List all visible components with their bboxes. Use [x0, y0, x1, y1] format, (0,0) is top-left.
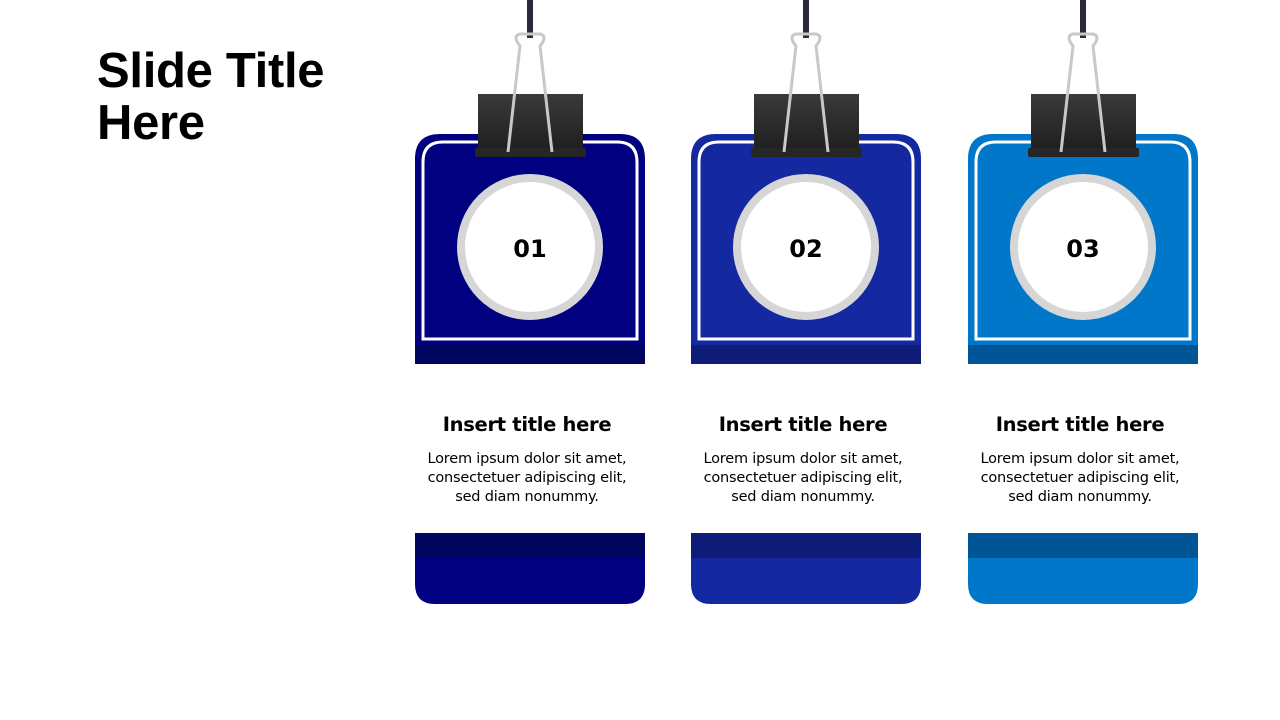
card 1: 01	[513, 235, 547, 263]
title: Here	[97, 96, 205, 150]
text block 1: Insert title here	[443, 413, 611, 436]
text block 3: consectetuer adipiscing elit,	[981, 470, 1179, 486]
text block 3: sed diam nonummy.	[1008, 489, 1152, 505]
text block 1: consectetuer adipiscing elit,	[428, 470, 626, 486]
text block 1: sed diam nonummy.	[455, 489, 599, 505]
card 3	[968, 0, 1198, 604]
text block 2: Lorem ipsum dolor sit amet,	[704, 451, 902, 467]
text block 2	[704, 413, 902, 505]
title	[97, 44, 324, 150]
text block 1: Lorem ipsum dolor sit amet,	[428, 451, 626, 467]
text block 1	[428, 413, 626, 505]
card 3: 03	[1066, 235, 1100, 263]
title: Slide Title	[97, 44, 324, 98]
card 2	[691, 0, 921, 604]
text block 3	[981, 413, 1179, 505]
card 2: 02	[789, 235, 823, 263]
text block 2: Insert title here	[719, 413, 887, 436]
text block 3: Lorem ipsum dolor sit amet,	[981, 451, 1179, 467]
card 1	[415, 0, 645, 604]
text block 3: Insert title here	[996, 413, 1164, 436]
text block 2: consectetuer adipiscing elit,	[704, 470, 902, 486]
text block 2: sed diam nonummy.	[731, 489, 875, 505]
